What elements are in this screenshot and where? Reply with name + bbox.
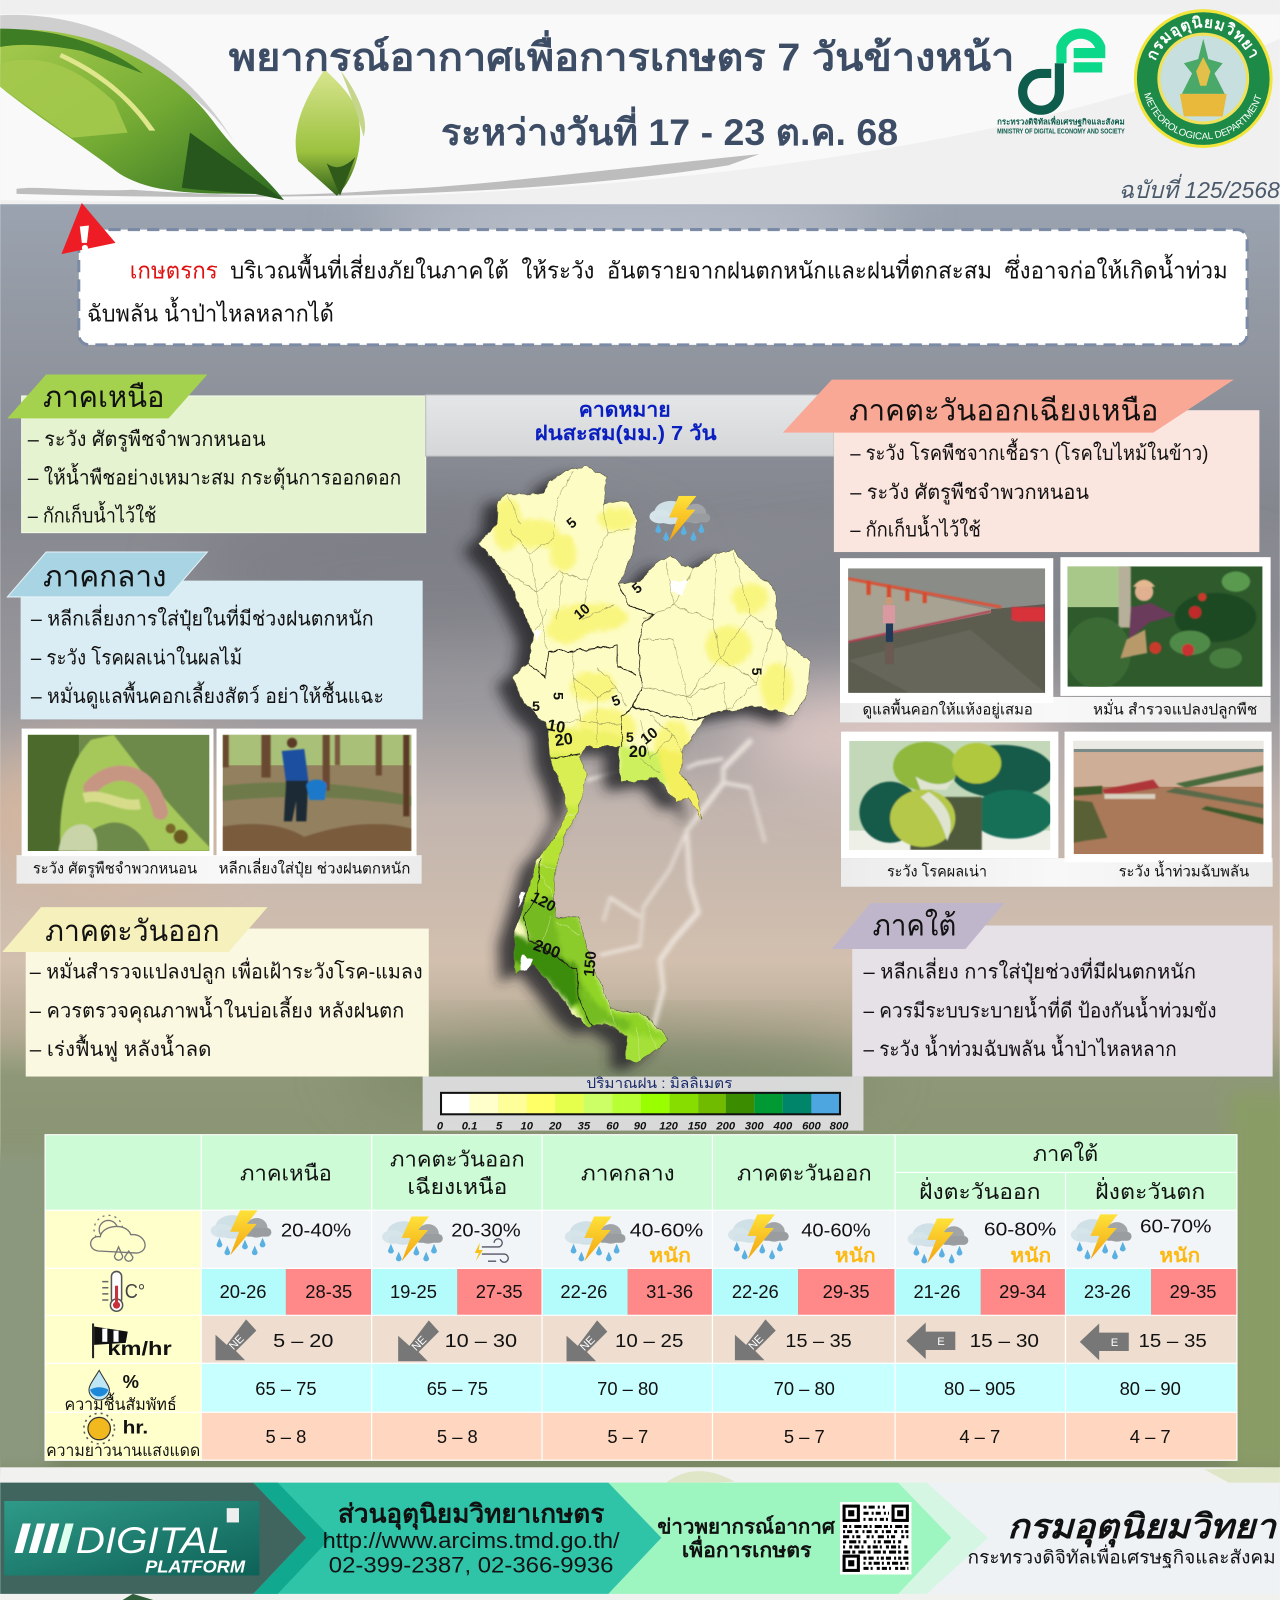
panel: east advisory: – หมั่นสำรวจแปลงปลูก เพื่อเฝ้าระวังโรค-แมลง [30,958,423,985]
icon: weather row [91,1215,145,1261]
table header labels: ฝั่งตะวันออก [919,1177,1041,1204]
rain chance row: 40-60% [801,1220,871,1241]
digital platform logo [4,1501,259,1576]
table header labels: ภาคตะวันออก [737,1162,872,1186]
table header labels: ภาคตะวันออก [390,1147,525,1171]
rainfall contour labels: 5 [564,515,580,532]
wind row with direction arrows: NE [410,1334,429,1354]
panel: south advisory: – ระวัง น้ำท่วมฉับพลัน น้ำป่าไหลหลาก [863,1034,1177,1061]
department name [968,1509,1278,1568]
map heading strip [426,395,834,456]
temperature row: 31-36 [646,1281,693,1302]
panel: south advisory: – ควรมีระบบระบายน้ำที่ดี ป้องกันน้ำท่วมขัง [863,995,1217,1022]
heading: south: ภาคใต้ [873,909,956,943]
temperature row: 21-26 [913,1281,960,1302]
rainfall contour labels: 20 [554,730,574,750]
temperature row: 22-26 [732,1281,779,1302]
legend: rainfall scale: 150 [688,1121,707,1133]
heading: northeast [783,380,1234,433]
caption: inspect plots: หมั่น สำรวจแปลงปลูกพืช [1093,698,1257,718]
agromet division contact: http://www.arcims.tmd.go.th/ [323,1528,620,1553]
rain chance row: หนัก [649,1245,691,1267]
rainfall contour labels: 5 [629,580,646,597]
sunshine row: 4 – 7 [1130,1426,1171,1447]
panel: east advisory: – ควรตรวจคุณภาพน้ำในบ่อเลี้ยง หลังฝนตก [30,995,404,1023]
wind row with direction arrows: NE [227,1333,247,1353]
panel: northeast advisory: – ระวัง ศัตรูพืชจำพวกหนอน [850,481,1089,505]
rainfall contour labels: 5 [626,730,634,746]
map heading strip: คาดหมาย [579,399,671,421]
icon: wind sock with km/hr [92,1323,172,1360]
rainfall contour labels: 20 [629,743,647,761]
panel: central advisory: – ระวัง โรคผลเน่าในผลไม้ [31,645,242,669]
heading: east: ภาคตะวันออก [45,915,220,948]
panel: east advisory [2,907,429,1077]
rain chance row: หนัก [1159,1245,1200,1267]
legend: rainfall scale: 0.1 [462,1121,477,1133]
rain chance row: หนัก [1010,1245,1051,1267]
heading: north [7,374,207,418]
rainfall contour labels: 5 [748,667,764,675]
agromet division contact: 02-399-2387, 02-366-9936 [329,1552,613,1577]
temperature row: 20-26 [220,1281,267,1302]
rainfall contour labels: 150 [581,950,600,977]
department name: กระทรวงดิจิทัลเพื่อเศรษฐกิจและสังคม [968,1544,1276,1568]
logo: meteorological department seal [1134,9,1273,148]
panel: north advisory: – กักเก็บน้ำไว้ใช้ [28,500,156,527]
map heading strip: ฝนสะสม(มม.) 7 วัน [535,423,717,445]
humidity row: 70 – 80 [597,1378,658,1399]
agromet division contact: ส่วนอุตุนิยมวิทยาเกษตร [338,1500,605,1530]
rain chance row: 40-60% [630,1220,703,1241]
rain chance row [211,1210,1211,1267]
heading: north: ภาคเหนือ [43,381,164,414]
legend: rainfall scale [423,1076,863,1133]
temperature row: 29-35 [1170,1281,1217,1302]
wind row with direction arrows: 5 – 20 [273,1330,333,1351]
title: พยากรณ์อากาศเพื่อการเกษตร 7 วันข้างหน้า [229,29,1014,79]
agromet division contact [323,1500,620,1577]
legend: rainfall scale: 600 [802,1121,822,1133]
panel: northeast advisory: – กักเก็บน้ำไว้ใช้ [850,515,981,542]
edition number: ฉบับที่ 125/2568 [1119,173,1280,203]
caption: flash flood: ระวัง น้ำท่วมฉับพลัน [1119,861,1250,881]
legend: rainfall scale: 10 [520,1121,534,1133]
icon: thunderstorm on map [649,496,710,541]
icon: large green leaf [0,29,284,200]
icon: temperature: C° [125,1281,145,1303]
temperature row: 22-26 [560,1281,607,1302]
icon: small green leaf [296,69,365,196]
temperature row: 29-35 [823,1281,870,1302]
table header labels: ฝั่งตะวันตก [1095,1177,1205,1204]
heading: south [832,903,1004,949]
wind row with direction arrows: 10 – 25 [615,1330,683,1351]
icon: humidity: % [123,1371,139,1392]
photo: rotten papaya [849,740,1050,850]
digital platform logo: PLATFORM [145,1556,246,1576]
wind row with direction arrows: 10 – 30 [445,1330,517,1351]
rain chance row: หนัก [835,1245,876,1267]
rainfall contour labels: 10 [638,724,661,748]
temperature row: 19-25 [390,1281,437,1302]
header band [0,9,1280,204]
rainfall contour labels: 5 [610,692,623,710]
rainfall contour labels: 10 [571,601,594,623]
rain chance row: 60-70% [1140,1216,1211,1237]
sunshine row [265,1426,1171,1447]
subtitle: date range: ระหว่างวันที่ 17 - 23 ต.ค. 68 [441,106,898,153]
rain chance row: 20-30% [451,1220,521,1241]
sunshine row: 5 – 7 [607,1426,648,1447]
wind row with direction arrows: NE [578,1334,598,1354]
heading: northeast: ภาคตะวันออกเฉียงเหนือ [849,394,1158,427]
heading: central: ภาคกลาง [43,561,167,594]
logo: ministry of digital economy: MINISTRY OF DIGITAL ECONOMY AND SOCIETY [997,128,1125,136]
temperature row: 23-26 [1084,1281,1131,1302]
legend: rainfall scale: 5 [496,1121,503,1133]
sunshine row: 5 – 7 [784,1426,825,1447]
table header labels: ภาคกลาง [581,1162,675,1186]
wind row with direction arrows: E [1111,1337,1118,1349]
wind row with direction arrows: 15 – 35 [785,1330,852,1351]
humidity row: 80 – 90 [1120,1378,1181,1399]
QR code [840,1502,911,1574]
weather news label: ข่าวพยากรณ์อากาศ [657,1516,836,1539]
map: Thailand 7-day accumulated rainfall [463,462,817,1072]
photo: farmer fertilizing in rubber plantation [222,734,412,851]
humidity row: 65 – 75 [427,1378,488,1399]
caption: avoid fertilizer: หลีกเลี่ยงใส่ปุ๋ย ช่วงฝนตกหนัก [219,857,410,878]
warning callout [79,230,1247,345]
legend: rainfall scale: 0 [437,1121,444,1133]
humidity row: 80 – 905 [944,1378,1016,1399]
icon: humidity [64,1370,177,1414]
wind row with direction arrows: E [937,1336,945,1348]
footer band [0,1467,1280,1600]
heading: central [7,552,207,597]
photo: flooded farm [1074,740,1264,854]
panel: north advisory: – ให้น้ำพืชอย่างเหมาะสม กระตุ้นการออกดอก [28,463,401,491]
icon: wind sock with km/hr: km/hr [107,1338,172,1360]
legend: rainfall scale: 800 [830,1121,849,1133]
legend: rainfall scale: 35 [578,1121,591,1133]
rainfall contour labels: 5 [532,699,540,715]
panel: northeast advisory: – ระวัง โรคพืชจากเชื้อรา (โรคใบไหม้ในข้าว) [850,438,1208,465]
digital platform logo: DIGITAL [76,1520,230,1561]
logo: ministry of digital economy [997,34,1125,136]
humidity row: 65 – 75 [255,1378,317,1399]
table header labels: เฉียงเหนือ [407,1175,507,1199]
panel: north advisory [7,374,426,533]
icon: sunshine hours [46,1413,200,1460]
legend: rainfall scale: 200 [715,1121,736,1133]
icon: sunshine hours: ความยาวนานแสงแดด [46,1442,200,1460]
wind row with direction arrows: 15 – 30 [970,1330,1039,1351]
rain chance row: 20-40% [281,1220,351,1241]
rainfall contour labels: 5 [549,692,565,700]
legend: rainfall scale: 60 [606,1121,619,1133]
table header labels: ภาคเหนือ [240,1162,332,1186]
rainfall contour labels [528,515,764,977]
wind row with direction arrows: NE [746,1333,766,1353]
temperature row: 29-34 [999,1281,1046,1302]
temperature row [220,1281,1217,1302]
humidity row [255,1378,1181,1399]
icon: warning triangle [61,203,116,254]
table header labels: ภาคใต้ [1033,1141,1098,1166]
humidity row: 70 – 80 [774,1378,835,1399]
photos: central region [17,729,422,884]
logo: meteorological department seal: กรมอุตุนิยมวิทยา [1148,15,1257,60]
rainfall contour labels: 200 [531,936,563,962]
panel: central advisory: – หลีกเลี่ยงการใส่ปุ๋ยในที่มีช่วงฝนตกหนัก [31,605,374,632]
panel: north advisory: – ระวัง ศัตรูพืชจำพวกหนอน [28,428,266,452]
legend: rainfall scale: 120 [659,1121,679,1133]
icon: humidity: ความชื้นสัมพัทธ์ [64,1392,177,1414]
rain chance row: 60-80% [984,1219,1056,1240]
panel: south advisory [832,903,1273,1077]
panel: east advisory: – เร่งฟื้นฟู หลังน้ำลด [30,1034,211,1062]
legend: rainfall scale: ปริมาณฝน : มิลลิเมตร [586,1076,733,1092]
rainfall contour labels: 10 [546,716,567,737]
temperature row: 27-35 [476,1281,523,1302]
logo: meteorological department seal: METEOROLOGICAL DEPARTMENT [1144,92,1261,140]
sunshine row: 5 – 8 [265,1426,306,1447]
legend: rainfall scale: 20 [548,1121,562,1133]
panel: central advisory: – หมั่นดูแลพื้นคอกเลี้ยงสัตว์ อย่าให้ชื้นแฉะ [31,681,384,709]
wind row with direction arrows [216,1319,1207,1361]
legend: rainfall scale: 300 [745,1121,764,1133]
icon: sunshine hours: hr. [123,1417,148,1438]
photos: east region [841,732,1273,887]
wind row with direction arrows: 15 – 35 [1138,1330,1207,1351]
photo: caterpillar on plant [28,734,210,851]
panel: northeast advisory [783,380,1259,552]
legend: rainfall scale: 400 [772,1121,793,1133]
sunshine row: 4 – 7 [959,1426,1000,1447]
photo: farmer inspecting coffee plant [1068,566,1262,687]
department name: กรมอุตุนิยมวิทยา [1007,1509,1278,1548]
caption: rotten fruit: ระวัง โรคผลเน่า [887,863,987,881]
table header labels [240,1141,1205,1204]
photo: poultry house floor [848,568,1046,693]
warning callout: ฉับพลัน น้ำป่าไหลหลากได้ [87,296,334,326]
warning callout: เกษตรกร บริเวณพื้นที่เสี่ยงภัยในภาคใต้ ให้ระวัง อันตรายจากฝนตกหนักและฝนที่ตกสะสม ซึ่งอาจก่อให้เกิดน้ำท่วม [130,254,1228,284]
logo: ministry of digital economy: กระทรวงดิจิทัลเพื่อเศรษฐกิจและสังคม [997,115,1125,127]
caption: keep floor dry: ดูแลพื้นคอกให้แห้งอยู่เสมอ [862,698,1033,718]
heading: east [2,907,268,952]
legend: rainfall scale: 90 [634,1121,647,1133]
weather summary table [45,1135,1237,1460]
table cell backgrounds [45,1135,1237,1460]
caption: pest warning: ระวัง ศัตรูพืชจำพวกหนอน [33,859,198,877]
weather news label [657,1516,836,1562]
rainfall contour labels: 120 [528,889,558,916]
icon: temperature [102,1271,145,1311]
weather news label: เพื่อการเกษตร [682,1535,811,1562]
sunshine row: 5 – 8 [437,1426,478,1447]
photos: northeast region [840,557,1271,722]
temperature row: 28-35 [305,1281,352,1302]
panel: central advisory [7,552,423,719]
panel: south advisory: – หลีกเลี่ยง การใส่ปุ๋ยช่วงที่มีฝนตกหนัก [863,958,1196,985]
